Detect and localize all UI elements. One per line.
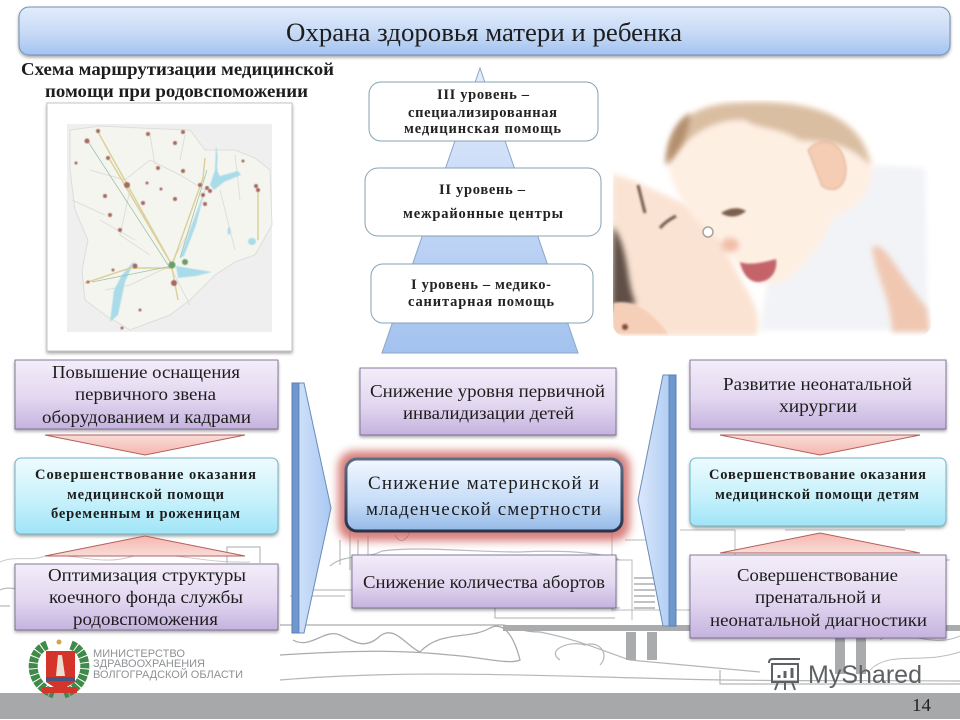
mother ear: [613, 302, 668, 334]
arrow up: [720, 533, 920, 553]
watermark icon: [769, 659, 800, 690]
box: bed fund: [15, 564, 278, 630]
level III box: III уровень –: [437, 87, 530, 103]
arrow down: [720, 435, 920, 455]
box: diagnostics: пренатальной и: [755, 587, 881, 607]
level III box: [369, 82, 598, 141]
photo: mother and baby: [612, 100, 931, 336]
arrow down: [45, 435, 245, 455]
glow: [338, 451, 630, 541]
level III box: медицинская помощь: [404, 121, 561, 137]
box: care for children: Совершенствование оказания: [709, 467, 926, 483]
ministry text: ЗДРАВООХРАНЕНИЯ: [93, 658, 205, 670]
box: equipment: Повышение оснащения: [52, 362, 240, 382]
level I box: I уровень – медико-: [411, 277, 551, 293]
box: bed fund: Оптимизация структуры: [48, 565, 246, 585]
map water: [110, 146, 256, 322]
mother's earring: [703, 227, 713, 237]
box: equipment: оборудованием и кадрами: [42, 407, 251, 427]
box: disability: Снижение уровня первичной: [370, 381, 605, 401]
emblem: [33, 640, 85, 694]
arrow up: [45, 536, 245, 556]
level III box: специализированная: [408, 105, 557, 121]
box: equipment: [15, 360, 278, 429]
left chevron: [292, 383, 331, 633]
map borders: [72, 135, 240, 305]
box: abortions: Снижение количества абортов: [363, 572, 605, 592]
baby eye: [721, 208, 746, 217]
heading: routing scheme: [21, 59, 334, 101]
box: care for pregnant: Совершенствование оказания: [35, 467, 256, 483]
box: diagnostics: Совершенствование: [737, 565, 898, 585]
heading: routing scheme: Схема маршрутизации медицинской: [21, 59, 334, 79]
box: abortions: [352, 555, 616, 608]
box: care for pregnant: беременным и роженицам: [51, 506, 240, 522]
baby mouth: [740, 259, 776, 282]
ministry text: [93, 648, 243, 681]
background cityscape: [0, 520, 960, 684]
box: care for pregnant: медицинской помощи: [67, 487, 224, 503]
mother face: [612, 174, 758, 336]
box: equipment: первичного звена: [75, 384, 216, 404]
watermark: MyShared: [808, 661, 922, 689]
bridge: [503, 625, 960, 674]
center column: [338, 368, 630, 608]
mother hair: [612, 226, 636, 312]
footer band: [0, 693, 960, 719]
main box: младенческой смертности: [366, 499, 601, 520]
baby hair: [666, 103, 870, 165]
heading: routing scheme: помощи при родовспоможении: [45, 81, 308, 101]
box: disability: инвалидизации детей: [403, 403, 574, 423]
baby nose: [721, 238, 739, 252]
mother brow and eye: [638, 185, 676, 228]
mother's hand: [872, 246, 930, 332]
watermark: [769, 659, 922, 690]
title bar: Охрана здоровья матери и ребенка: [286, 18, 682, 47]
box: neonatal surgery: [690, 360, 946, 429]
level I box: [371, 264, 593, 323]
baby head: [668, 103, 873, 284]
main box: Снижение материнской и: [368, 473, 599, 494]
pyramid: [365, 68, 601, 353]
baby hair left: [666, 113, 690, 165]
level II box: II уровень –: [439, 182, 526, 198]
title bar: [19, 7, 950, 55]
left column: [15, 360, 278, 630]
map roads: [85, 132, 258, 300]
box: care for pregnant: [15, 458, 278, 534]
box: bed fund: родовспоможения: [73, 609, 218, 629]
right chevron: [638, 375, 676, 626]
level I box: санитарная помощь: [408, 294, 554, 310]
map hub: [168, 259, 188, 268]
baby ear: [808, 142, 846, 189]
box: neonatal surgery: Развитие неонатальной: [723, 374, 912, 394]
box: care for children: [690, 458, 946, 526]
box: diagnostics: [690, 555, 946, 638]
box: disability: [360, 368, 616, 435]
map regions: [70, 126, 272, 330]
ministry text: ВОЛГОГРАДСКОЙ ОБЛАСТИ: [93, 668, 243, 681]
box: neonatal surgery: хирургии: [779, 396, 857, 416]
ministry text: МИНИСТЕРСТВО: [93, 648, 185, 660]
box: care for children: медицинской помощи детям: [715, 487, 919, 503]
mother ear shadow: [622, 324, 628, 330]
map nodes: [74, 129, 260, 330]
box: bed fund: коечного фонда службы: [49, 587, 243, 607]
baby clothing: [760, 165, 928, 330]
right column: [690, 360, 946, 638]
main box: [346, 459, 622, 531]
level II box: [365, 168, 601, 236]
page number: 14: [912, 695, 931, 715]
panel: map: [47, 103, 292, 351]
level II box: межрайонные центры: [403, 206, 563, 222]
box: diagnostics: неонатальной диагностики: [710, 610, 927, 630]
